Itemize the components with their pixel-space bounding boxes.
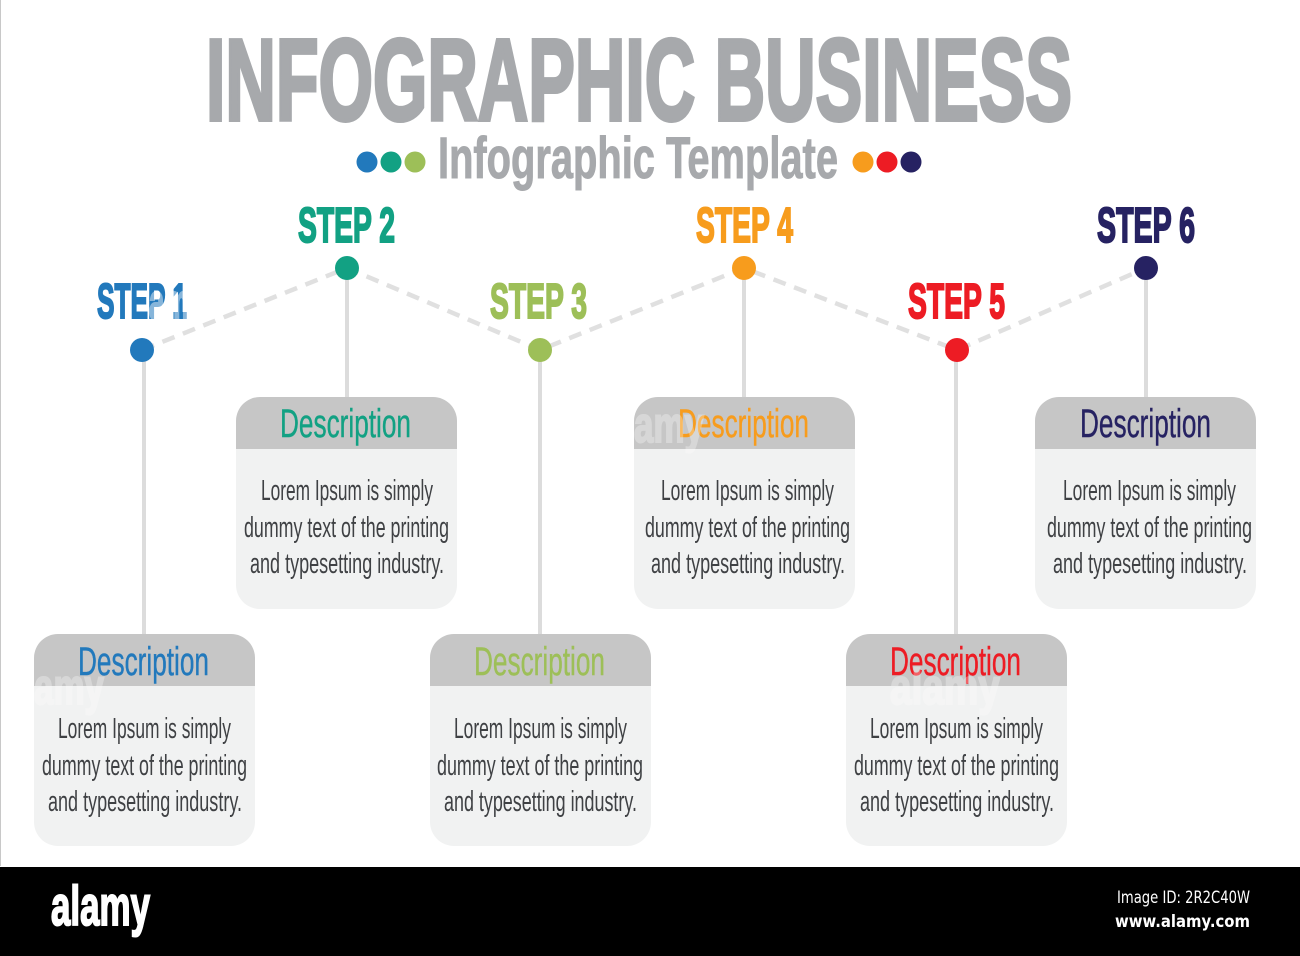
watermarks: amy: [34, 659, 104, 715]
card 2: [236, 397, 457, 609]
marker 1: [130, 338, 154, 362]
card 1 body: and typesetting industry.: [48, 786, 242, 818]
card 5 body: Lorem Ipsum is simply: [870, 713, 1043, 745]
card 1 header: [34, 634, 255, 686]
connector 6: [1144, 268, 1148, 399]
card 4 body: and typesetting industry.: [651, 548, 845, 580]
card 3: [430, 634, 651, 846]
subtitle row: [356, 126, 922, 191]
card 4 body: [645, 475, 850, 580]
image id: Image ID: 2R2C40W: [1117, 888, 1250, 907]
right colour dots: [852, 152, 922, 172]
step 1 label: STEP 1: [97, 275, 187, 329]
step 3: [430, 275, 651, 846]
card 1 body: [42, 713, 247, 818]
watermarks: amy: [634, 397, 704, 453]
step 1: [34, 275, 255, 846]
website: www.alamy.com: [1115, 912, 1250, 931]
card 4 body: dummy text of the printing: [645, 512, 850, 544]
card 1: [34, 634, 255, 846]
marker 4: [732, 256, 756, 280]
step 2: [236, 199, 457, 609]
card 3 body: Lorem Ipsum is simply: [454, 713, 627, 745]
card 6 title: Description: [1080, 402, 1211, 446]
card 6 header: [1035, 397, 1256, 449]
marker 2: [335, 256, 359, 280]
marker 3: [528, 338, 552, 362]
step 5: [846, 275, 1067, 846]
step 6: [1035, 199, 1256, 609]
footer bar: [0, 867, 1300, 956]
card 1 title: Description: [78, 640, 209, 684]
card 3 title: Description: [474, 640, 605, 684]
connector 2: [345, 268, 349, 399]
card 1 body: dummy text of the printing: [42, 750, 247, 782]
watermarks: [34, 274, 1000, 715]
connector 3: [538, 350, 542, 636]
card 6 body: [1047, 475, 1252, 580]
step 6 label: STEP 6: [1097, 199, 1195, 253]
card 2 header: [236, 397, 457, 449]
watermarks: alamy: [890, 659, 1000, 715]
dashed timeline: [142, 268, 1146, 350]
card 4 body: Lorem Ipsum is simply: [661, 475, 834, 507]
connector 5: [954, 350, 958, 636]
marker 5: [945, 338, 969, 362]
card 2 body: [244, 475, 449, 580]
connector 4: [742, 268, 746, 399]
card 2 body: Lorem Ipsum is simply: [261, 475, 433, 507]
card 2 title: Description: [280, 402, 411, 446]
card 1 body: Lorem Ipsum is simply: [58, 713, 231, 745]
step 4: [634, 199, 855, 609]
card 2 body: dummy text of the printing: [244, 512, 449, 544]
card 3 body: dummy text of the printing: [437, 750, 643, 782]
card 3 header: [430, 634, 651, 686]
card 5: [846, 634, 1067, 846]
card 4 header: [634, 397, 855, 449]
card 5 body: and typesetting industry.: [860, 786, 1054, 818]
subtitle: Infographic Template: [438, 126, 838, 191]
card 5 header: [846, 634, 1067, 686]
card 3 body: and typesetting industry.: [444, 786, 637, 818]
card 4 title: Description: [678, 402, 809, 446]
card 4: [634, 397, 855, 609]
left colour dots: [356, 152, 426, 172]
marker 6: [1134, 256, 1158, 280]
card 5 title: Description: [890, 640, 1021, 684]
card 5 body: dummy text of the printing: [854, 750, 1059, 782]
card 2 body: and typesetting industry.: [250, 548, 444, 580]
card 3 body: [437, 713, 643, 818]
step 2 label: STEP 2: [298, 199, 395, 253]
step 4 label: STEP 4: [696, 199, 793, 253]
card 6: [1035, 397, 1256, 609]
alamy logo: alamy: [51, 874, 150, 937]
watermarks: am: [149, 274, 189, 330]
step 5 label: STEP 5: [908, 275, 1005, 329]
connector 1: [142, 350, 146, 636]
step 3 label: STEP 3: [490, 275, 587, 329]
card 5 body: [854, 713, 1059, 818]
